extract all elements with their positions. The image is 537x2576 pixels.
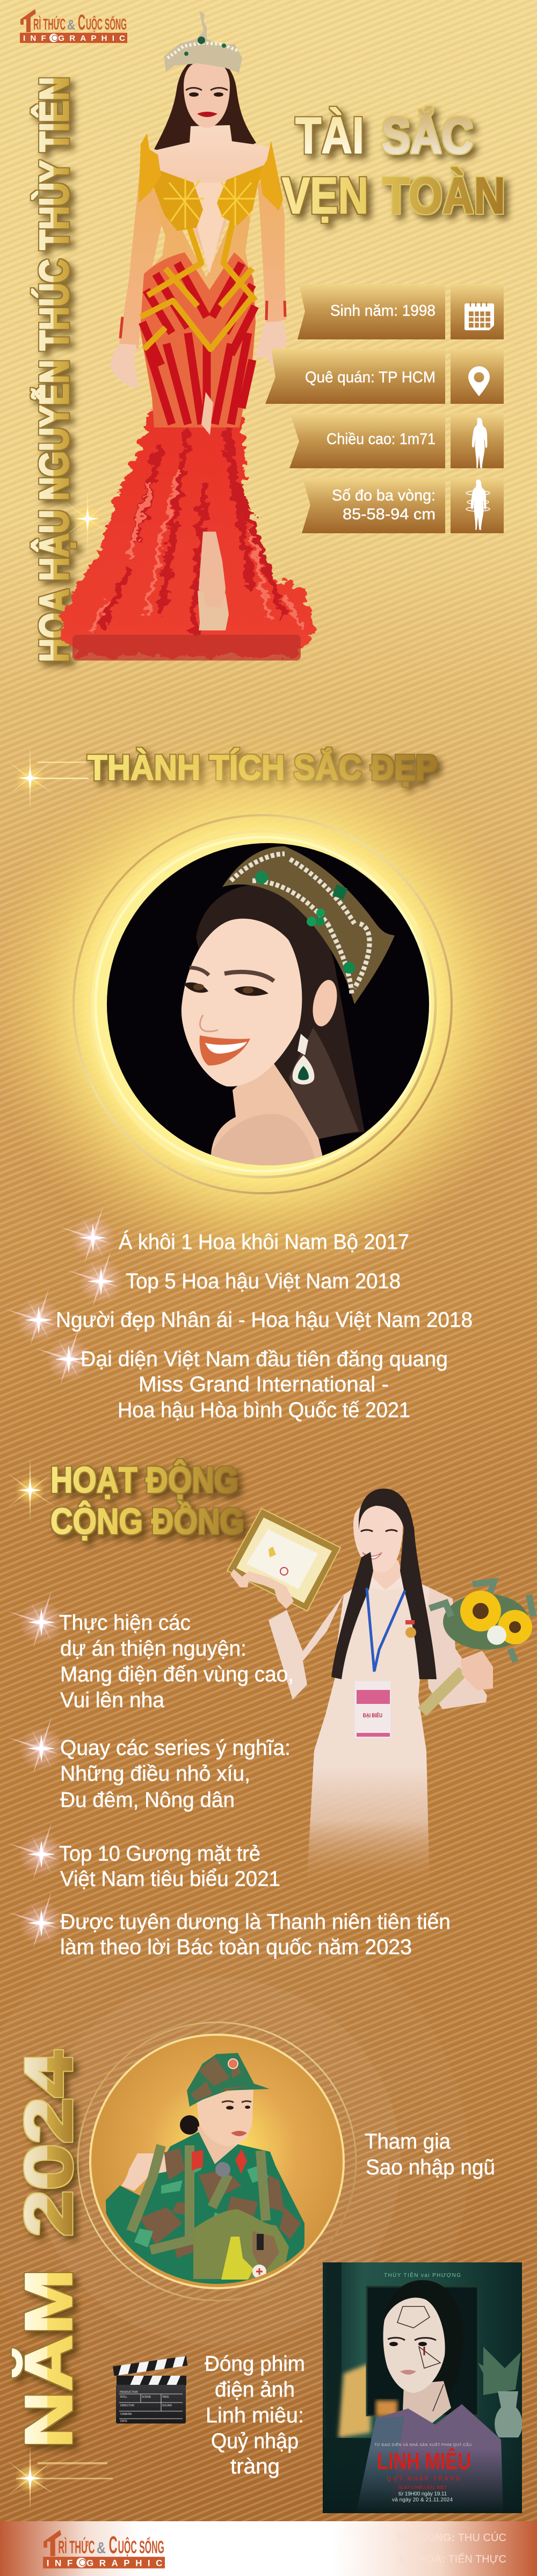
- credits: [397, 2531, 506, 2565]
- gold shoulder wings: [139, 133, 283, 211]
- footer logo: INF GRAPHIC: [47, 2558, 162, 2568]
- logo: Tri thuc & Cuoc song infographic: C: [78, 11, 85, 34]
- badge: [354, 1681, 391, 1738]
- poster texts: THÙY TIÊN vai PHƯỢNG: [384, 2272, 461, 2279]
- microphone: [215, 2162, 230, 2177]
- bouquet: [430, 1581, 533, 1662]
- info row: birth year: Sinh năm: 1998: [330, 302, 436, 320]
- uniform: [106, 2132, 304, 2297]
- poster texts: từ 19H00 ngày 19.11: [398, 2491, 447, 2497]
- credits: NỘI DUNG: THU CÚC: [397, 2531, 506, 2544]
- info row: birth year: [297, 284, 504, 339]
- info row: hometown: [265, 349, 504, 404]
- ao dai body: [307, 1576, 430, 1886]
- shoulder: [211, 1063, 322, 1165]
- pale band: [90, 831, 436, 1177]
- warm light: [338, 2363, 371, 2438]
- soldier medallion: [78, 2022, 356, 2301]
- collar: [368, 1573, 405, 1591]
- info row: height: Chiều cao: 1m71: [326, 431, 436, 448]
- achievements text: Hoa hậu Hòa bình Quốc tế 2021: [118, 1398, 410, 1422]
- right hair strand: [400, 1527, 437, 1679]
- activities text: Mang điện đến vùng cao,: [60, 1663, 294, 1686]
- photo: soldier: [106, 2053, 304, 2297]
- heading: HOẠT ĐỘNG CỘNG ĐỒNG: CỘNG ĐỒNG: [50, 1500, 244, 1542]
- icon: calendar: [465, 302, 494, 330]
- photo: portrait with crown: [107, 843, 429, 1171]
- icon: film clapperboard: DATE: [120, 2420, 128, 2423]
- footer logo: C: [109, 2531, 117, 2558]
- poster texts: [374, 2272, 471, 2503]
- cap: [187, 2053, 270, 2107]
- badge: ĐẠI BIỂU: [363, 1712, 382, 1719]
- vase: [495, 2391, 523, 2437]
- text: film role: điện ảnh: [215, 2378, 295, 2401]
- credits: ĐỒ HỌA: TIẾN THỰC: [399, 2552, 506, 2565]
- rings: [78, 2022, 356, 2301]
- blouse: [356, 2404, 503, 2513]
- footer logo: [43, 2530, 165, 2568]
- straps: [131, 2145, 266, 2250]
- activities text: [59, 1611, 451, 1959]
- poster texts: và ngày 20 & 21.11.2024: [392, 2497, 453, 2503]
- logo: Tri thuc & Cuoc song infographic: &: [67, 17, 75, 33]
- nose: [200, 1015, 218, 1032]
- portrait medallion: [5, 746, 519, 1267]
- crown: [222, 846, 395, 1004]
- icon: film clapperboard: PRODUCTION: [120, 2391, 138, 2394]
- achievements text: Đại diện Việt Nam đầu tiên đăng quang: [81, 1347, 448, 1371]
- backpack: [193, 2209, 289, 2279]
- word: TÀI: TÀI: [295, 107, 364, 164]
- earring: [293, 1034, 314, 1085]
- neck: [403, 2381, 451, 2429]
- glow: [0, 725, 537, 1283]
- text: film role: Linh miêu:: [206, 2404, 304, 2427]
- text: UỘC SỐNG: [86, 15, 127, 33]
- poster texts: LINH MIÊU: [377, 2448, 471, 2475]
- list: community activities: [0, 1580, 451, 1959]
- medal: [405, 1620, 416, 1638]
- face: [383, 2298, 445, 2393]
- bouquet stems: [422, 1671, 463, 1712]
- crown: [164, 11, 242, 73]
- left hand: [230, 1569, 294, 1609]
- left sleeve: [268, 1595, 344, 1700]
- activities text: Những điều nhỏ xíu,: [60, 1762, 250, 1786]
- sparkle with streaks: [8, 746, 89, 810]
- hands: [111, 344, 140, 388]
- shoes: [198, 591, 229, 630]
- info row: measurements: Số đo ba vòng:: [332, 487, 436, 504]
- text: Sao nhập ngũ: Tham gia: [365, 2130, 451, 2153]
- activities text: Top 10 Gương mặt trẻ: [59, 1842, 260, 1866]
- back hair: [196, 885, 365, 1137]
- neck and chest: [148, 125, 270, 267]
- ear: [313, 979, 337, 1027]
- activities text: Đu đêm, Nông dân: [60, 1788, 235, 1812]
- arm cuffs: [120, 301, 285, 338]
- activities text: Được tuyên dương là Thanh niên tiên tiến: [60, 1910, 451, 1934]
- icon: silhouette: [472, 418, 487, 468]
- achievements text: [56, 1230, 473, 1422]
- face: [184, 60, 230, 128]
- word: SẮC: SẮC: [381, 106, 473, 164]
- slit and leg: [201, 392, 213, 435]
- hair: [154, 57, 256, 155]
- door frame: [367, 2287, 478, 2415]
- achievements text: Miss Grand International -: [139, 1373, 389, 1396]
- info row: hometown: Quê quán: TP HCM: [305, 369, 436, 386]
- heading: HOẠT ĐỘNG CỘNG ĐỒNG: HOẠT ĐỘNG: [50, 1459, 238, 1500]
- sparkle by community heading: [8, 1458, 55, 1522]
- flowers: [478, 2347, 521, 2395]
- achievements text: Top 5 Hoa hậu Việt Nam 2018: [126, 1269, 401, 1293]
- achievements text: Người đẹp Nhân ái - Hoa hậu Việt Nam 2018: [56, 1308, 473, 1332]
- poster texts: TỪ ĐẠO DIỄN VÀ NHÀ SẢN XUẤT PHIM QUỶ CẨU: [374, 2442, 471, 2447]
- info row: height: [289, 413, 504, 468]
- word: NĂM: NĂM: [12, 2269, 86, 2448]
- left arm: [119, 161, 164, 349]
- icon: film clapperboard: TAKE: [162, 2396, 169, 2399]
- left curtain: [325, 2262, 342, 2440]
- poster texts: QUỶ NHẬP TRÀNG: [387, 2475, 460, 2482]
- hair: [384, 2280, 463, 2398]
- icon: film clapperboard: SOUND: [162, 2404, 172, 2407]
- text: film role: tràng: [230, 2455, 280, 2478]
- icon: map pin: [468, 366, 490, 396]
- icon: film clapperboard: SCENE: [142, 2396, 151, 2399]
- sparkles: [0, 1195, 128, 1390]
- sparkle by name: [65, 487, 112, 551]
- floor reflection: [72, 635, 301, 661]
- hand: [121, 2153, 166, 2191]
- icon: film clapperboard: CAMERA: [120, 2413, 132, 2416]
- icon: silhouette with rings: [466, 480, 490, 530]
- logo: Tri thuc & Cuoc song infographic: [20, 9, 127, 43]
- sparkle with streaks under NĂM: [8, 2446, 113, 2510]
- icon: film clapperboard: [113, 2356, 187, 2423]
- right sleeve: [424, 1588, 487, 1709]
- sheer bodice: [141, 204, 256, 427]
- glow disc: [90, 2035, 344, 2288]
- photo: woman in red feather gown: [62, 11, 317, 661]
- hair bun: [180, 2115, 199, 2135]
- text: Sao nhập ngũ: [365, 2130, 495, 2179]
- icon: film clapperboard: DIRECTOR: [120, 2404, 134, 2407]
- gold chevrons: [141, 215, 256, 349]
- right arm: [258, 161, 286, 325]
- text: film role: Đóng phim: [205, 2352, 305, 2376]
- footer logo: &: [97, 2539, 106, 2557]
- movie poster: Linh miêu: [323, 2262, 523, 2513]
- text: film role: [205, 2352, 305, 2478]
- left hair strand: [331, 1552, 373, 1679]
- mouth: [200, 1035, 250, 1065]
- logo: Tri thuc & Cuoc song infographic: INF GRAPHIC: [23, 34, 125, 43]
- activities text: Việt Nam tiêu biểu 2021: [60, 1867, 280, 1891]
- word: 2024: 2024: [12, 2051, 86, 2237]
- red sequined hips: [140, 252, 256, 427]
- collar patches: [192, 2150, 203, 2171]
- activities text: Vui lên nha: [60, 1688, 165, 1712]
- certificate frame: [227, 1508, 340, 1611]
- sparkles: [0, 1580, 69, 1954]
- activities text: làm theo lời Bác toàn quốc năm 2023: [60, 1935, 412, 1959]
- word: VẸN: VẸN: [282, 167, 368, 224]
- activities text: Thực hiện các: [59, 1611, 191, 1635]
- footer logo: RÌ THỨC: [58, 2537, 95, 2557]
- activities text: dự án thiện nguyện:: [60, 1637, 246, 1660]
- photo: woman in ao dai with certificate and bouquet: [227, 1489, 533, 1886]
- bottom darkening: [323, 2449, 522, 2513]
- gold bust clusters: [152, 168, 203, 231]
- footer band: UỘC SỐNG: [118, 2536, 164, 2557]
- brows and eyes: [190, 968, 209, 975]
- info row: measurements: 85-58-94 cm: [343, 506, 436, 523]
- achievements text: Á khôi 1 Hoa khôi Nam Bộ 2017: [119, 1230, 409, 1254]
- face: [182, 919, 302, 1086]
- table: [323, 2438, 371, 2513]
- list: beauty achievements: [0, 1195, 473, 1422]
- neck and face: [198, 2127, 236, 2164]
- vertical heading: NĂM 2024: [12, 2051, 86, 2448]
- heading: HOẠT ĐỘNG CỘNG ĐỒNG: [50, 1459, 244, 1542]
- plunge: [185, 183, 234, 274]
- activities text: Quay các series ý nghĩa:: [60, 1736, 291, 1760]
- text: Sao nhập ngũ: Sao nhập ngũ: [366, 2156, 495, 2179]
- footer band: [0, 2521, 537, 2576]
- icon: film clapperboard: ROLL: [120, 2396, 127, 2399]
- neck and face: [369, 1557, 403, 1590]
- word: TOÀN: TOÀN: [383, 167, 505, 224]
- hair crown: [359, 1489, 414, 1536]
- lanyard: [367, 1588, 405, 1672]
- info row: measurements: [302, 477, 504, 533]
- poster texts: SUẤT CHIẾU ĐẶC BIỆT: [398, 2485, 447, 2490]
- text: film role: Quỷ nhập: [211, 2429, 299, 2453]
- right hand: [461, 1651, 493, 1690]
- background arcs of 2024 section: [0, 1909, 469, 2414]
- heading: TÀI SẮC VẸN TOÀN: [282, 106, 505, 224]
- outer ring: [74, 815, 452, 1193]
- heading: THÀNH TÍCH SẮC ĐẸP: THÀNH TÍCH SẮC ĐẸP: [88, 748, 437, 787]
- logo: Tri thuc & Cuoc song infographic: RÌ THỨC: [33, 15, 66, 33]
- feather skirt: [62, 408, 317, 656]
